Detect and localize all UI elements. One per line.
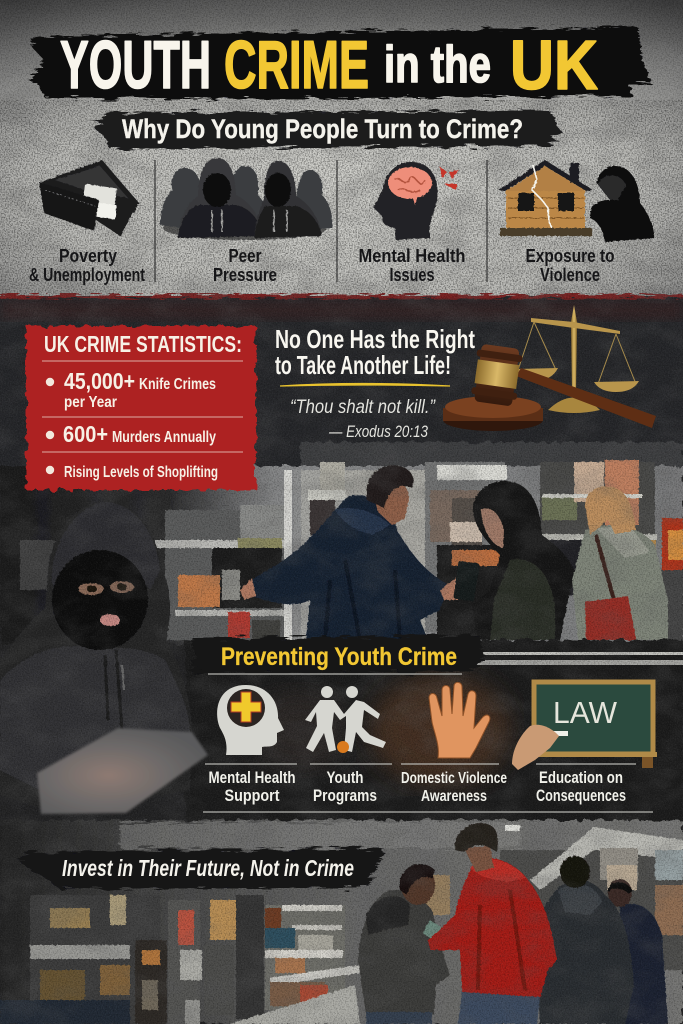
- stat: shoplifting: Rising Levels of Shoplifting: [64, 464, 218, 481]
- label: Exposure to: [526, 246, 614, 266]
- title text: in the: [384, 36, 491, 94]
- stat: shoplifting: [46, 464, 218, 481]
- quote: Exodus: — Exodus 20:13: [328, 422, 428, 441]
- slogan text: Invest in Their Future, Not in Crime: [62, 855, 354, 881]
- icon: two figures with ball: [305, 686, 386, 753]
- label: Education on: [539, 769, 623, 787]
- label: [358, 246, 466, 285]
- title text: CRIME: [224, 27, 369, 103]
- label: [313, 769, 377, 805]
- headline: right to life: No One Has the Right: [275, 324, 475, 354]
- label: [526, 246, 614, 285]
- label: Consequences: [536, 787, 626, 805]
- label: Youth: [326, 769, 364, 787]
- label: [401, 770, 507, 805]
- pillars and fridge: [284, 470, 292, 640]
- solution: youth programs: [305, 686, 386, 805]
- cause: exposure to violence: [498, 160, 654, 285]
- icon: wallet: [39, 160, 139, 236]
- icon: cracked house and hooded figure: [498, 160, 654, 242]
- red painted box: [26, 326, 256, 490]
- label: Domestic Violence: [401, 770, 507, 787]
- icon: head with cross: [217, 685, 284, 755]
- label: Violence: [540, 265, 600, 285]
- solution: education on consequences: [512, 682, 657, 805]
- stat: knife crimes: [46, 368, 216, 411]
- icon: raised hand: [429, 682, 490, 758]
- man in navy jacket: [240, 465, 460, 640]
- panel: concrete header background: [0, 0, 683, 296]
- brush stroke: [18, 848, 385, 889]
- stat: murders: Murders Annually: [112, 429, 216, 446]
- slogan banner: [18, 848, 385, 889]
- title text: [60, 26, 598, 104]
- label: [536, 769, 626, 805]
- title banner: [30, 26, 650, 104]
- subtitle text: Why Do Young People Turn to Crime?: [122, 114, 523, 144]
- quote: Exodus: “Thou shalt not kill.”: [290, 397, 436, 418]
- cause: poverty and unemployment: [29, 160, 145, 285]
- solution: domestic violence awareness: [401, 682, 507, 805]
- yellow underline: [280, 384, 450, 386]
- divider rules: [203, 764, 653, 812]
- brush stroke: [30, 27, 650, 99]
- panel: dark statistics band background: [0, 294, 683, 468]
- brush stroke: [94, 110, 562, 149]
- hooded woman: [453, 481, 578, 640]
- quote: Exodus: [290, 397, 436, 441]
- label: Awareness: [421, 788, 487, 805]
- label: Mental Health: [208, 769, 296, 787]
- label: Peer: [228, 246, 262, 266]
- solution: mental health support: [208, 685, 296, 805]
- label: Mental Health: [358, 246, 466, 266]
- divider lines: [155, 160, 487, 282]
- label: Support: [224, 787, 280, 805]
- stat: knife crimes: Knife Crimes: [139, 376, 216, 393]
- label: Pressure: [213, 265, 277, 285]
- label: [29, 246, 145, 285]
- figure: masked man in hoodie: [0, 502, 192, 815]
- label: Issues: [390, 265, 434, 285]
- man in grey hoodie, back view: [536, 856, 634, 1024]
- subtitle banner: [94, 110, 562, 149]
- label: Programs: [313, 787, 377, 805]
- stat: murders: 600+: [63, 421, 108, 447]
- section banner: preventing youth crime: [190, 635, 484, 674]
- title text: UK: [510, 26, 598, 104]
- icon: judge's gavel: [443, 343, 656, 431]
- panel: dark preventing background: [185, 640, 683, 820]
- title text: YOUTH: [60, 27, 211, 103]
- man in red hoodie: [428, 823, 557, 1024]
- far right man: [608, 879, 668, 1024]
- stat: knife crimes: per Year: [64, 394, 117, 411]
- icon: hooded group: [160, 158, 332, 240]
- stat: murders: [46, 421, 216, 447]
- icon: head with brain: [373, 162, 459, 240]
- blonde woman: [572, 486, 668, 640]
- headline: right to life: to Take Another Life!: [275, 350, 451, 380]
- left shelves: [20, 505, 285, 640]
- man in grey jacket, looking at tablet: [358, 864, 450, 1024]
- heading: UK CRIME STATISTICS:: [44, 331, 242, 357]
- cause: mental health issues: [358, 162, 466, 285]
- label: [213, 246, 277, 285]
- icon: chalkboard with LAW: LAW: [553, 695, 618, 730]
- label: [208, 769, 296, 805]
- label: Poverty: [59, 246, 117, 266]
- icon: chalkboard with LAW: [512, 682, 657, 770]
- cause: peer pressure: [160, 158, 332, 285]
- panel: UK crime statistics: [26, 326, 256, 490]
- heading: Preventing Youth Crime: [221, 643, 457, 671]
- headline: right to life: [275, 324, 475, 386]
- brush stroke: [190, 635, 484, 674]
- panel: lower shop scene background: [0, 820, 683, 1024]
- icon: scales of justice: [515, 305, 639, 413]
- stat: knife crimes: 45,000+: [64, 368, 135, 394]
- label: & Unemployment: [29, 265, 145, 285]
- blurred censored area: [37, 728, 208, 814]
- panel: shop scene with suspects: [0, 460, 683, 644]
